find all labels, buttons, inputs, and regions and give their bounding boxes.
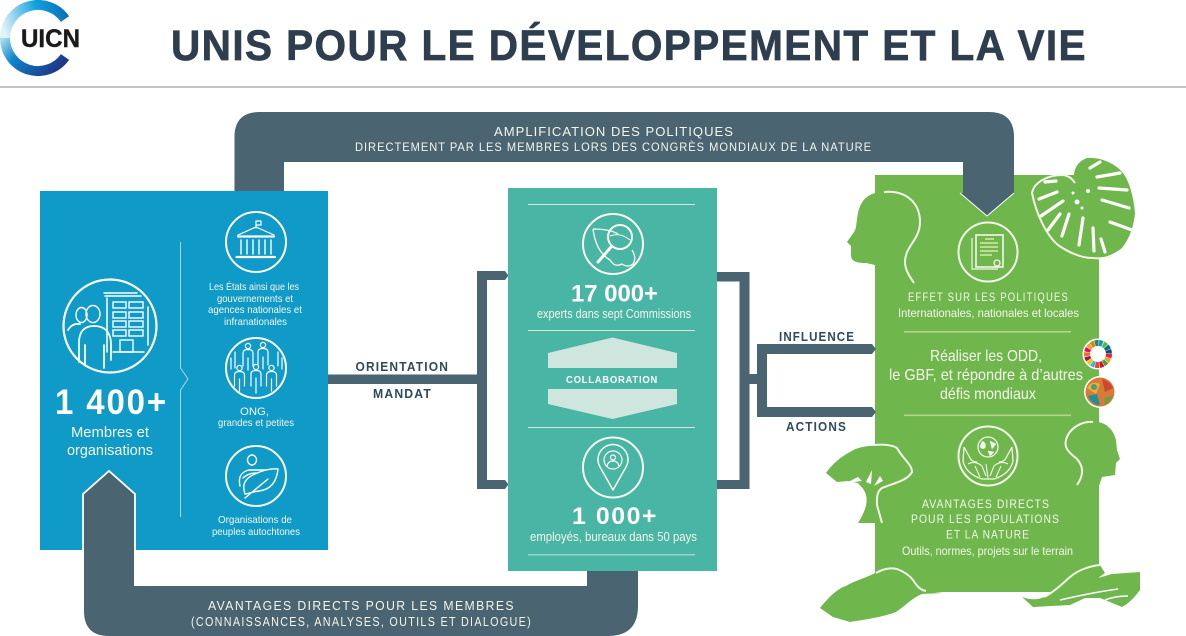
icon: woman head <box>1065 422 1120 486</box>
arrow: orientation and mandat bracket <box>328 271 508 489</box>
text: 1 000+ employés <box>530 503 697 544</box>
panel: commissions and secretariat (teal) <box>508 188 717 571</box>
text: réaliser les ODD: défis mondiaux <box>940 386 1036 403</box>
text: peuples autochtones <box>212 514 300 538</box>
logo: UICN: UICN <box>21 25 80 53</box>
title: UNIS POUR LE DÉVELOPPEMENT ET LA VIE <box>171 22 1087 70</box>
text: ONG <box>218 406 294 429</box>
icon: human head (left) <box>847 192 920 283</box>
collaboration arrows <box>548 338 677 419</box>
text: 1 400+ members: Membres et <box>71 424 150 441</box>
icon: NGO people <box>226 338 286 398</box>
panel: members (blue) <box>40 191 328 550</box>
text: 17 000+ experts: 17 000+ <box>571 280 658 308</box>
text: peuples autochtones: peuples autochtones <box>212 526 300 538</box>
arrow: influence and actions bracket <box>717 272 876 489</box>
text: avantages label <box>191 598 532 629</box>
label: mandat: MANDAT <box>373 387 432 401</box>
text: amplification label: AMPLIFICATION DES POLITIQUES <box>494 124 734 139</box>
icon: government building <box>226 212 286 272</box>
text: 1 400+ members: 1 400+ <box>55 383 168 422</box>
label: influence: INFLUENCE <box>779 330 855 344</box>
icon: monstera leaf <box>1032 158 1135 258</box>
icon: leaf bottom left <box>820 568 943 622</box>
label: actions: ACTIONS <box>786 420 847 434</box>
text: états: agences nationales et <box>208 304 302 316</box>
text: 1 000+ employés: 1 000+ <box>572 503 658 530</box>
text: amplification label: DIRECTEMENT PAR LES MEMBRES LORS DES CONGRÈS MONDIAUX DE LA NATURE <box>355 141 872 154</box>
text: amplification label <box>355 124 872 154</box>
text: états: Les États ainsi que les <box>209 280 299 293</box>
icon: tree <box>826 445 912 523</box>
logo: UICN <box>5 5 80 71</box>
text: avantages directs populations: AVANTAGES DIRECTS <box>922 497 1050 511</box>
text: avantages directs populations: Outils, normes, projets sur le terrain <box>902 544 1073 558</box>
icon: biodiversity globe <box>1084 376 1116 408</box>
text: réaliser les ODD <box>889 348 1083 403</box>
text: avantages directs populations <box>902 497 1073 558</box>
text: états <box>208 280 302 328</box>
text: peuples autochtones: Organisations de <box>218 514 292 526</box>
text: réaliser les ODD: le GBF, et répondre à d’autres <box>889 367 1083 384</box>
text: ONG: ONG, <box>240 406 269 418</box>
text: 1 000+ employés: employés, bureaux dans 50 pays <box>530 530 697 544</box>
arrow: amplification des politiques <box>234 112 1014 216</box>
text: avantages directs populations: ET LA NATURE <box>946 528 1030 542</box>
text: réaliser les ODD: Réaliser les ODD, <box>930 348 1042 365</box>
text: états: infranationales <box>224 316 287 328</box>
icon: leaf under magnifier <box>583 214 643 274</box>
text: 17 000+ experts <box>537 280 691 321</box>
icon: indigenous peoples leaf <box>226 446 286 506</box>
icon: policy document <box>958 222 1018 282</box>
arrow: avantages directs pour les membres <box>83 471 638 636</box>
collaboration arrows: COLLABORATION <box>566 374 658 386</box>
text: ONG: grandes et petites <box>218 417 294 429</box>
label: orientation: ORIENTATION <box>356 360 449 374</box>
icon: SDG wheel <box>1082 338 1114 370</box>
text: avantages directs populations: POUR LES POPULATIONS <box>911 512 1060 526</box>
text: 1 400+ members: organisations <box>67 442 153 459</box>
panel: impact (green) <box>820 158 1140 622</box>
text: effet sur les politiques: Internationales, nationales et locales <box>898 306 1079 320</box>
text: 1 400+ members <box>55 383 168 459</box>
text: effet sur les politiques <box>898 290 1079 320</box>
text: états: gouvernements et <box>217 293 293 305</box>
icon: hands holding globe <box>958 426 1018 486</box>
icon: location pin <box>583 438 643 498</box>
text: 17 000+ experts: experts dans sept Commissions <box>537 307 691 321</box>
icon: leaf bottom right <box>1022 565 1140 607</box>
text: avantages label: (CONNAISSANCES, ANALYSES, OUTILS ET DIALOGUE) <box>191 615 532 629</box>
text: effet sur les politiques: EFFET SUR LES POLITIQUES <box>908 290 1069 304</box>
icon: members and buildings <box>64 280 156 372</box>
text: avantages label: AVANTAGES DIRECTS POUR LES MEMBRES <box>208 598 515 613</box>
